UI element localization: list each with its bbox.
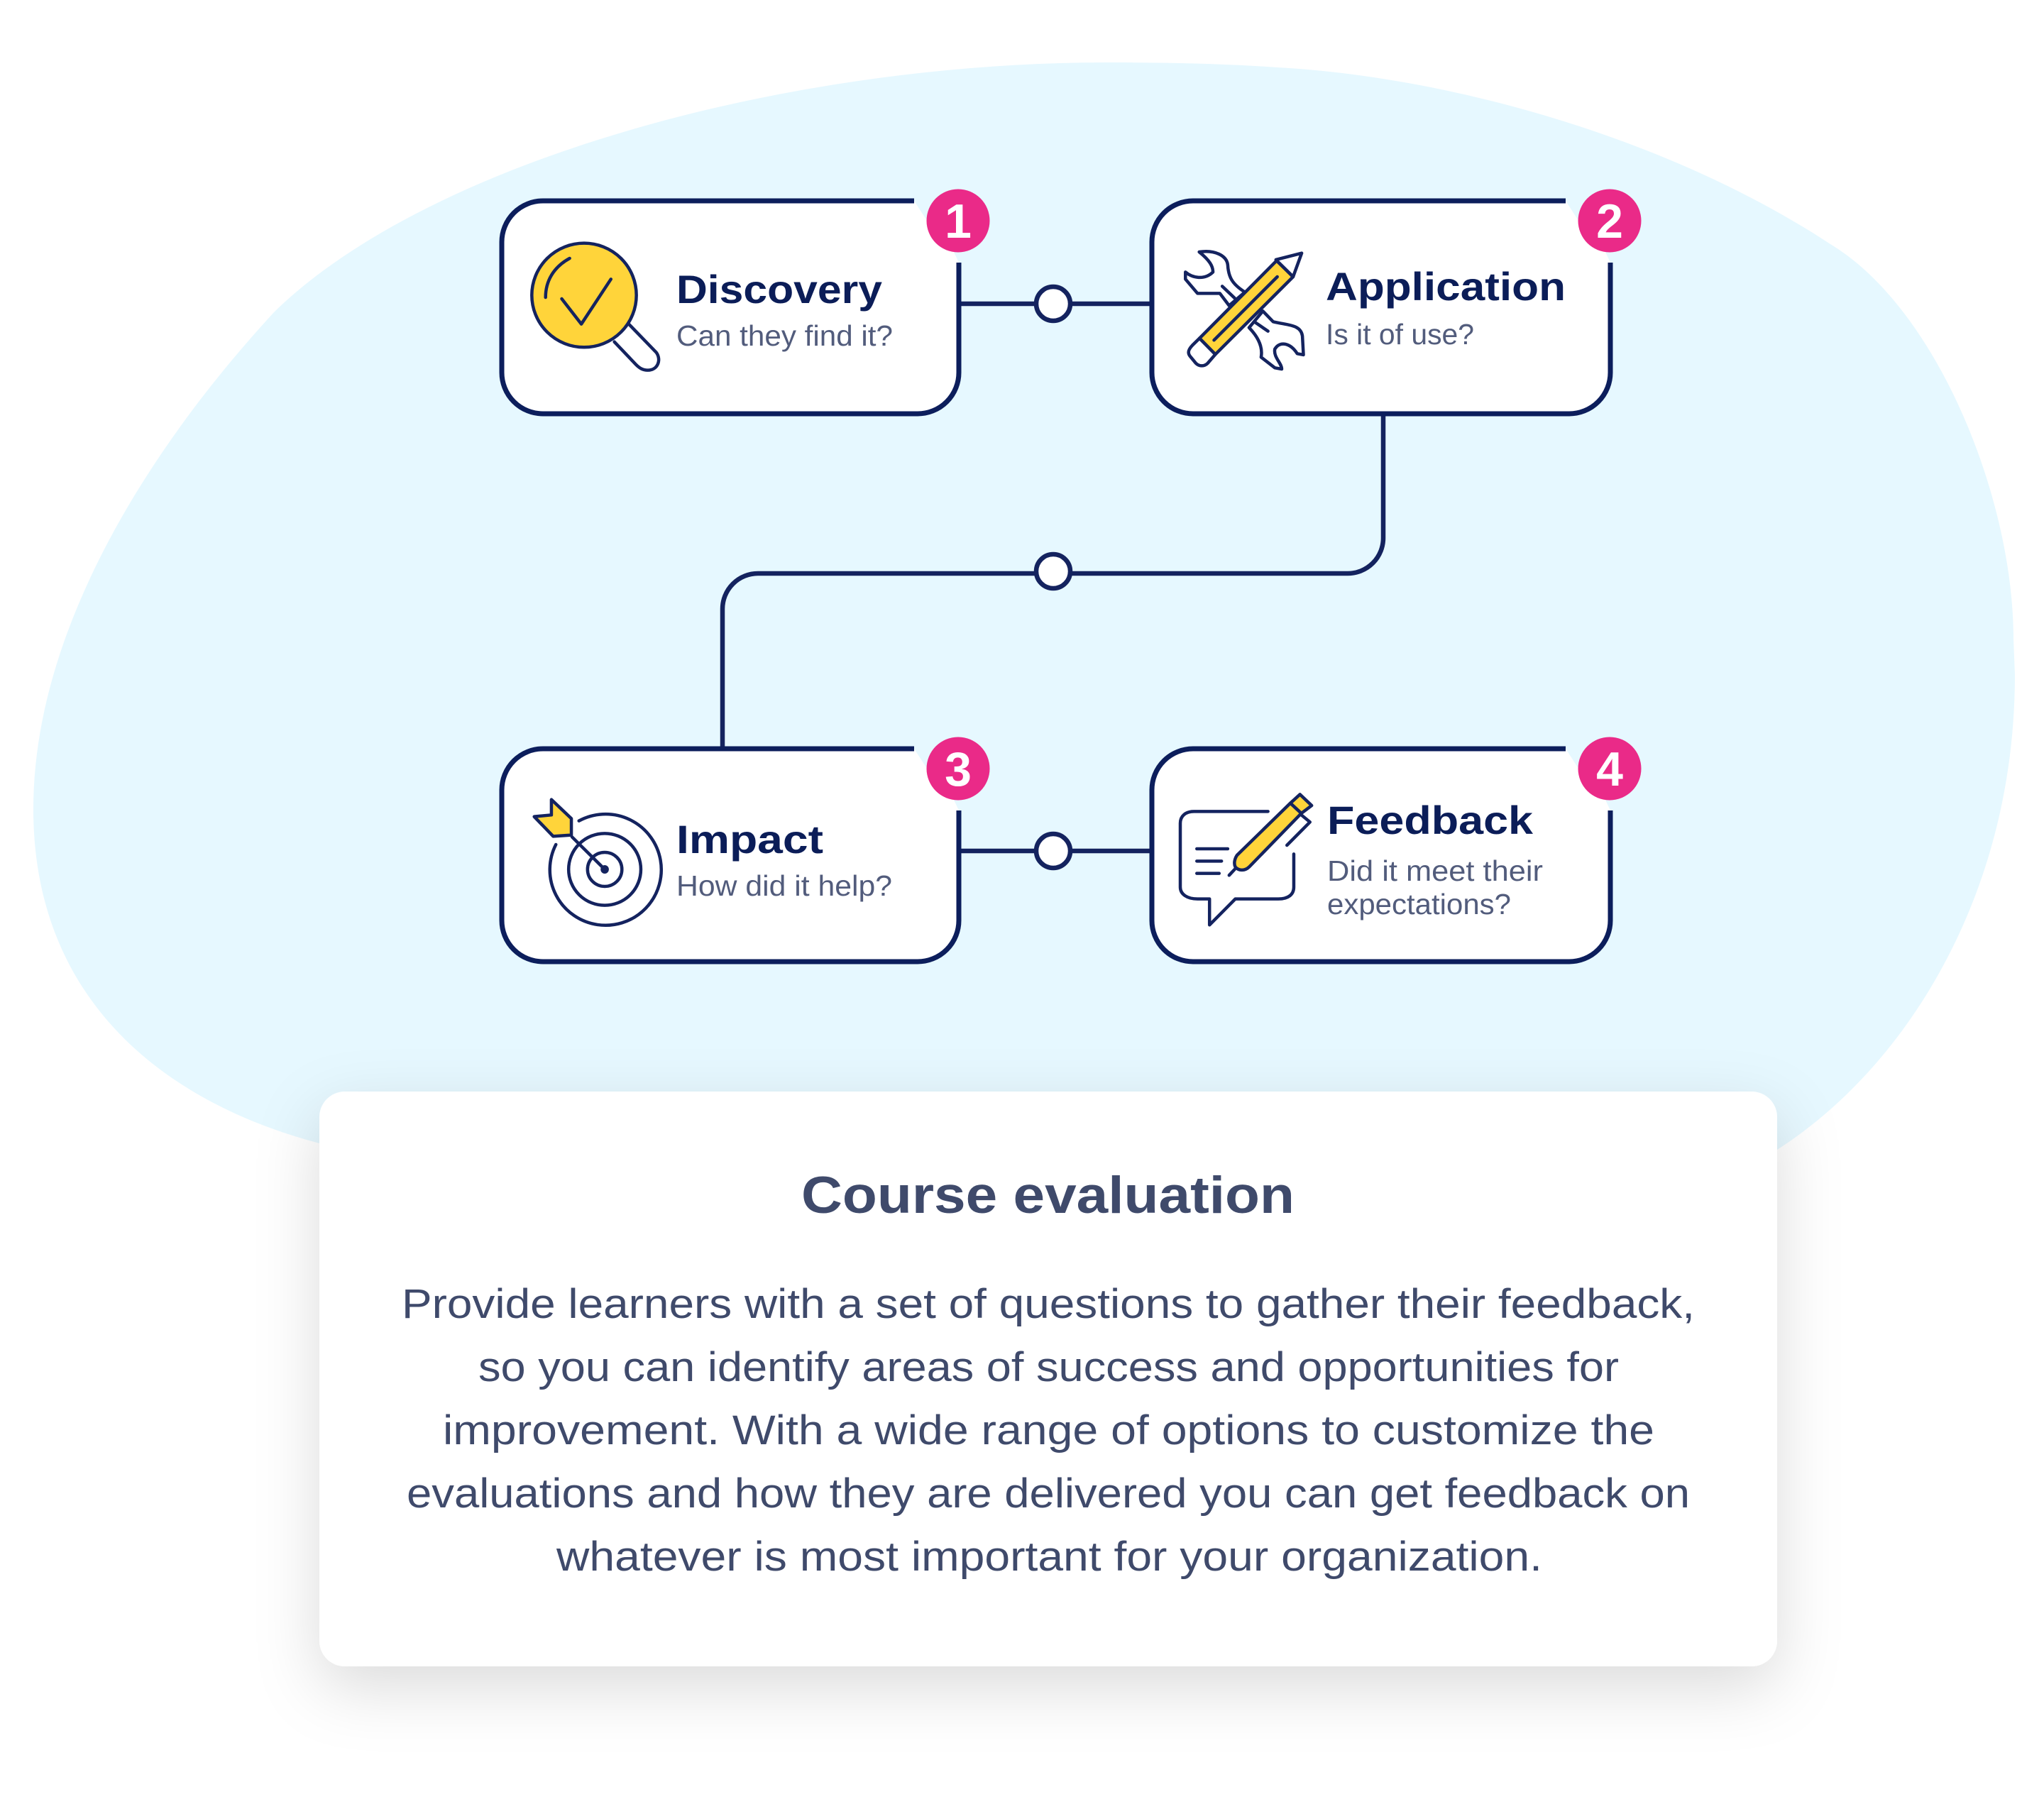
heading: feedback: Feedback	[1327, 798, 1534, 842]
subtext: discovery: Can they find it?	[676, 319, 893, 352]
panel: application	[1152, 189, 1641, 414]
badge 1: 1	[945, 194, 972, 248]
subtext: feedback: Did it meet their	[1327, 854, 1543, 887]
card body text: improvement. With a wide range of options to customize the	[443, 1407, 1654, 1453]
badge 2: 2	[1596, 194, 1623, 248]
panel: discovery	[502, 189, 989, 414]
badge 3	[927, 737, 989, 801]
badge 3: 3	[945, 742, 972, 796]
panel: course evaluation card	[319, 1092, 1777, 1666]
heading: impact: Impact	[676, 817, 823, 862]
card body text: Provide learners with a set of questions to gather their feedback,	[402, 1281, 1695, 1327]
subtext: impact: How did it help?	[676, 869, 892, 902]
card body text: evaluations and how they are delivered you can get feedback on	[407, 1471, 1690, 1517]
subtext: application: Is it of use?	[1326, 318, 1474, 351]
badge 2	[1578, 189, 1641, 253]
panel: feedback	[1152, 737, 1641, 962]
card body text: whatever is most important for your organization.	[556, 1534, 1542, 1580]
background blob	[33, 62, 2015, 1171]
heading: application: Application	[1326, 264, 1566, 309]
badge 4: 4	[1596, 742, 1623, 796]
panel: impact	[502, 737, 989, 962]
connector: step 1 to step 2	[959, 287, 1152, 321]
subtext: feedback second line: expectations?	[1327, 888, 1511, 920]
card heading: Course evaluation	[801, 1167, 1295, 1224]
icon: magnifier with check	[532, 243, 659, 370]
icon: target with arrow	[534, 800, 661, 925]
icon: wrench and pencil	[1185, 251, 1304, 369]
badge 4	[1578, 737, 1641, 801]
connector: step 3 to step 4	[959, 834, 1152, 868]
icon: speech bubble with pencil	[1180, 794, 1312, 925]
card body text	[402, 1281, 1695, 1580]
connector: step 2 to step 3	[722, 414, 1383, 749]
badge 1	[927, 189, 989, 253]
card body text: so you can identify areas of success and opportunities for	[478, 1344, 1619, 1390]
heading: discovery: Discovery	[676, 267, 882, 312]
